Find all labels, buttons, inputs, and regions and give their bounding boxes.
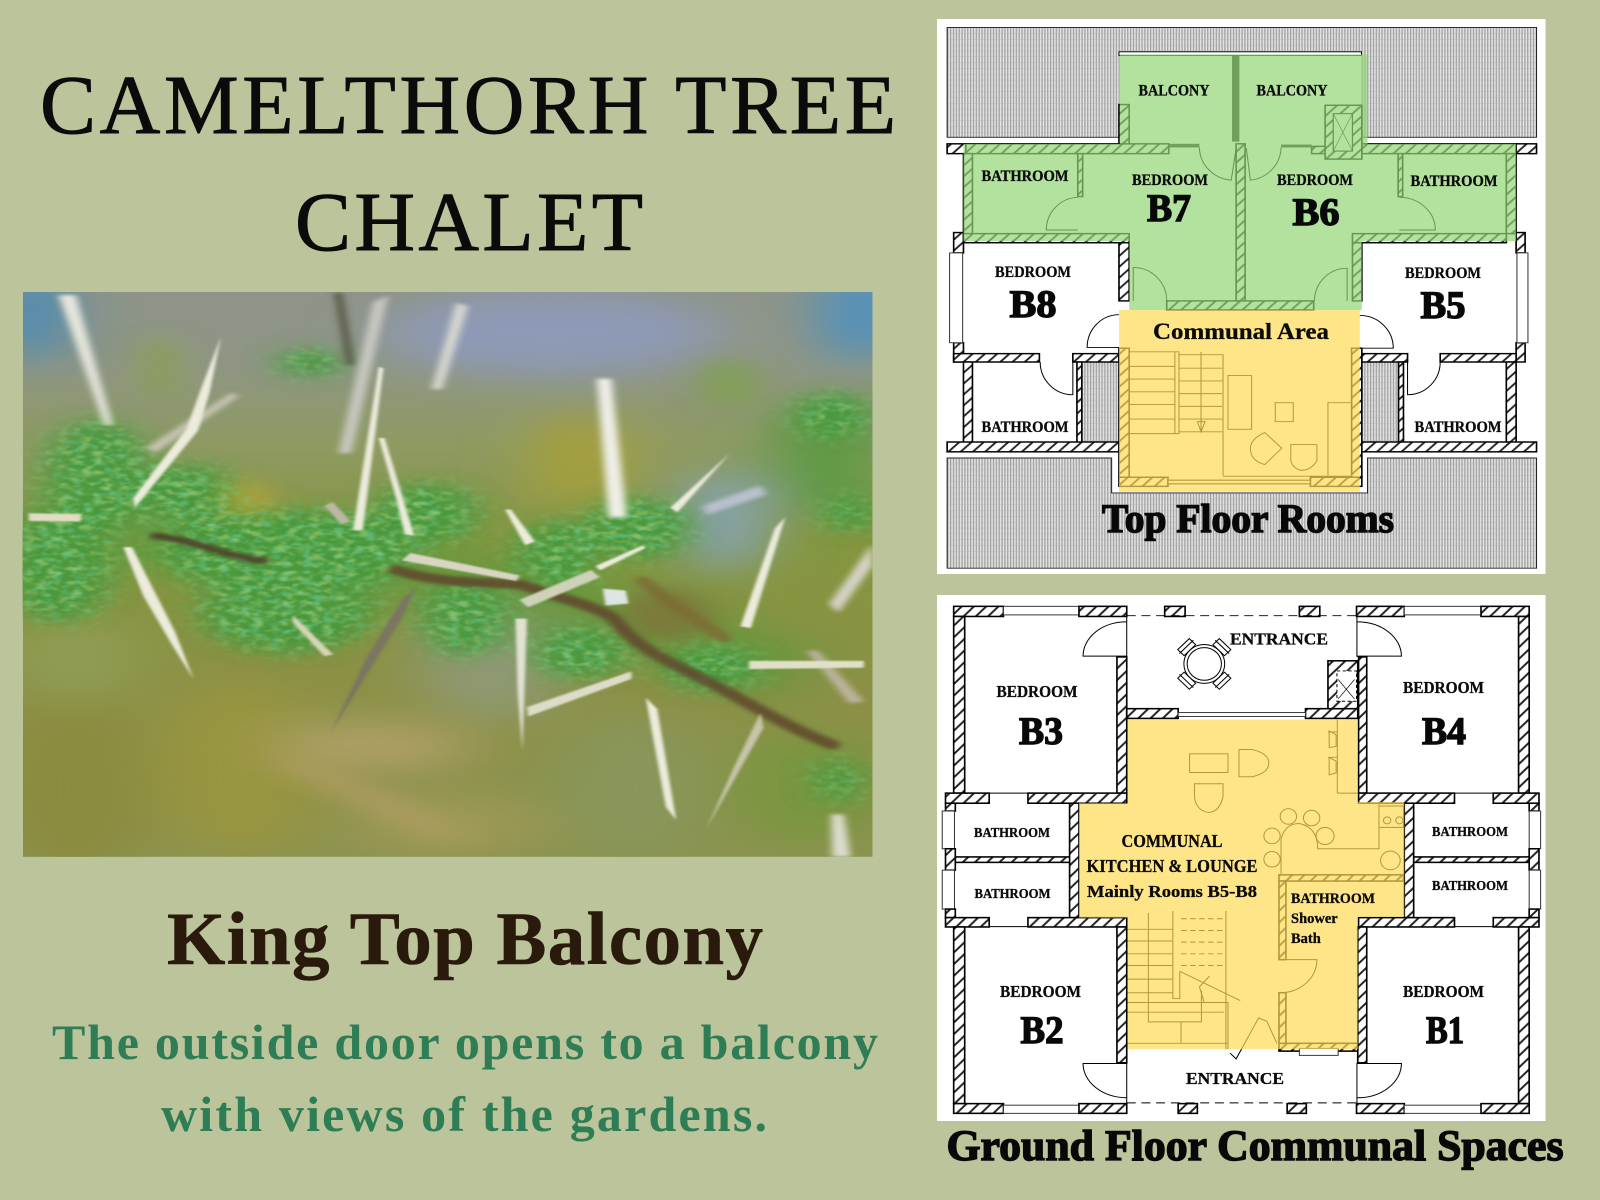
description text: with views of the gardens. (161, 1086, 767, 1142)
room labels: top floor: BATHROOM (1410, 173, 1498, 190)
communal kitchen label (1086, 831, 1258, 901)
communal area overlay (1119, 310, 1360, 492)
room labels: top floor: BATHROOM (982, 419, 1068, 436)
foliage texture (6, 350, 872, 803)
room labels: ground floor: BEDROOM (1000, 982, 1081, 1001)
room labels: ground floor: BATHROOM (1432, 825, 1508, 840)
room labels: top floor: BEDROOM (995, 264, 1071, 281)
kitchen and lounge furniture (1190, 720, 1403, 874)
room labels: ground floor: BEDROOM (996, 682, 1078, 701)
title: CAMELTHORH TREE (40, 59, 896, 152)
stairs and lounge furniture (1129, 352, 1352, 476)
walls (942, 606, 1541, 1113)
door swings (1040, 147, 1440, 395)
ground floor drawing (942, 606, 1541, 1113)
room labels: ground floor: BEDROOM (1403, 982, 1484, 1001)
room numbers: top floor (1010, 187, 1466, 327)
room numbers: top floor: B7 (1147, 187, 1191, 230)
room numbers: ground floor: B2 (1020, 1009, 1064, 1052)
bathroom label: Shower (1291, 911, 1338, 927)
communal kitchen label: Mainly Rooms B5-B8 (1087, 882, 1257, 901)
room labels: top floor: BATHROOM (1414, 419, 1502, 436)
description text: The outside door opens to a balcony (52, 1014, 878, 1070)
room labels: ground floor: BATHROOM (1432, 879, 1508, 894)
heading: room name: King Top Balcony (167, 898, 763, 981)
plan background (937, 595, 1546, 1121)
room labels: ground floor: BATHROOM (974, 887, 1050, 902)
roof cells between bathrooms (1082, 362, 1399, 442)
room numbers: top floor: B5 (1420, 284, 1466, 327)
caption: top floor rooms: Top Floor Rooms (1102, 496, 1394, 541)
description text (52, 1014, 878, 1142)
bathroom label: BATHROOM (1291, 891, 1375, 907)
plan background (937, 19, 1546, 574)
communal kitchen overlay (1079, 720, 1404, 1049)
foliage highlights (6, 350, 872, 803)
room labels: ground floor: ENTRANCE (1230, 630, 1328, 648)
top floor drawing (947, 27, 1537, 568)
room labels: top floor: BEDROOM (1405, 265, 1481, 282)
bathroom label: Bath (1291, 931, 1321, 947)
photo: camelthorn tree branch (0, 265, 895, 871)
room labels: top floor: BEDROOM (1277, 172, 1353, 189)
room labels: ground floor: BEDROOM (1403, 678, 1484, 697)
roof areas (947, 27, 1537, 568)
green rooms overlay (963, 54, 1516, 310)
room labels: top floor (982, 82, 1502, 436)
room labels: top floor: BATHROOM (982, 168, 1068, 185)
caption: ground floor communal spaces: Ground Floor Communal Spaces (946, 1123, 1564, 1170)
room numbers: top floor: B8 (1010, 283, 1056, 326)
room numbers: ground floor: B1 (1426, 1009, 1464, 1052)
balcony and room floor (954, 52, 1525, 486)
panel: ground floor plan (937, 595, 1564, 1170)
room labels: top floor: BEDROOM (1132, 172, 1208, 189)
walls (947, 52, 1537, 486)
room numbers: top floor: B6 (1292, 191, 1340, 234)
communal kitchen label: COMMUNAL (1122, 831, 1222, 851)
communal kitchen label: KITCHEN & LOUNGE (1086, 856, 1258, 876)
room labels: ground floor: ENTRANCE (1186, 1069, 1284, 1088)
title (40, 59, 896, 269)
panel: top floor plan (937, 19, 1546, 574)
room labels: top floor: BALCONY (1138, 82, 1210, 100)
stairs (1128, 911, 1240, 1049)
room numbers: ground floor (1019, 710, 1466, 1052)
title: CHALET (295, 176, 643, 269)
room labels: ground floor (974, 630, 1508, 1088)
icon: round table with chairs (1163, 624, 1246, 704)
door swings (989, 622, 1493, 1098)
room labels: top floor: BALCONY (1256, 82, 1328, 100)
bathroom label (1291, 891, 1375, 947)
room numbers: ground floor: B3 (1019, 710, 1063, 753)
communal area label: Communal Area (1153, 319, 1330, 344)
room labels: ground floor: BATHROOM (974, 826, 1050, 841)
room numbers: ground floor: B4 (1422, 710, 1466, 753)
